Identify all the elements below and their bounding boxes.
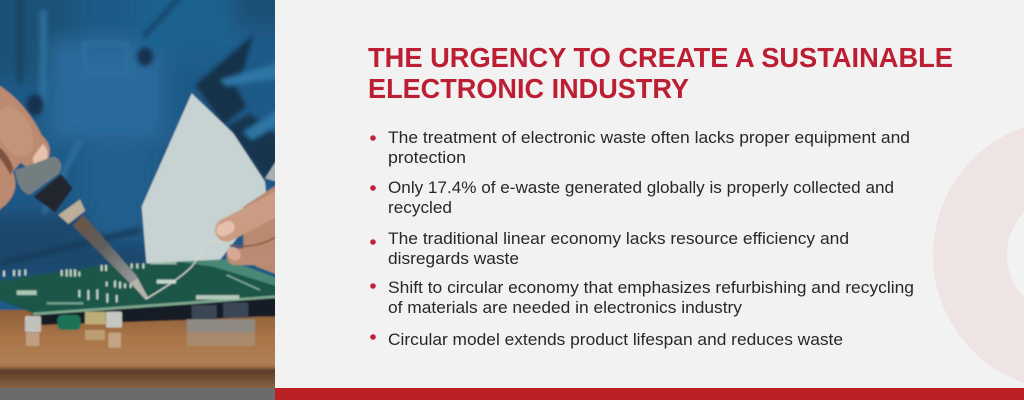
- iron tip: [131, 277, 149, 299]
- bullet: linear economy: disregards waste: [388, 250, 519, 268]
- heading: ELECTRONIC INDUSTRY: [368, 73, 689, 104]
- bullet: circular model: Circular model extends product lifespan and reduces waste: [388, 331, 843, 349]
- bullet: recycling rate: Only 17.4% of e-waste generated globally is properly collected and: [388, 179, 894, 197]
- background wall: [142, 93, 267, 267]
- shirt: [0, 0, 275, 311]
- iron collar: [33, 174, 73, 212]
- heading: THE URGENCY TO CREATE A SUSTAINABLE: [368, 42, 953, 73]
- iron handle: [15, 157, 61, 195]
- bullet: improper treatment: The treatment of electronic waste often lacks proper equipment and: [388, 129, 910, 147]
- bullet: recycling rate: recycled: [388, 199, 452, 217]
- solder wire: [146, 241, 230, 299]
- bullet: improper treatment: [370, 129, 910, 167]
- grey footer bar: [0, 388, 275, 400]
- heading: [368, 42, 953, 104]
- red footer bar: [275, 388, 1024, 400]
- bullet: linear economy: The traditional linear economy lacks resource efficiency and: [388, 230, 849, 248]
- wooden table: [0, 308, 275, 388]
- parts under the board: [24, 298, 275, 348]
- circuit board: [0, 259, 300, 314]
- bullet: improper treatment: protection: [388, 149, 466, 167]
- iron metal ring: [58, 199, 85, 224]
- decorative ring: [970, 156, 1024, 354]
- photo: hands soldering a circuit board: [0, 0, 275, 388]
- bullet: shift to circular economy: of materials are needed in electronics industry: [388, 299, 743, 317]
- dark sleeve: [194, 35, 275, 180]
- left hand: [0, 78, 50, 213]
- bullet: recycling rate: [370, 179, 894, 217]
- board components: [4, 263, 260, 303]
- shirt buttons: [26, 47, 153, 116]
- bullet: shift to circular economy: Shift to circular economy that emphasizes refurbishing and recycling: [388, 279, 914, 297]
- bullet: shift to circular economy: [370, 279, 914, 317]
- soldering iron: [15, 157, 149, 299]
- right hand: [214, 160, 275, 275]
- iron shaft: [73, 215, 137, 284]
- bullet: linear economy: [370, 230, 849, 268]
